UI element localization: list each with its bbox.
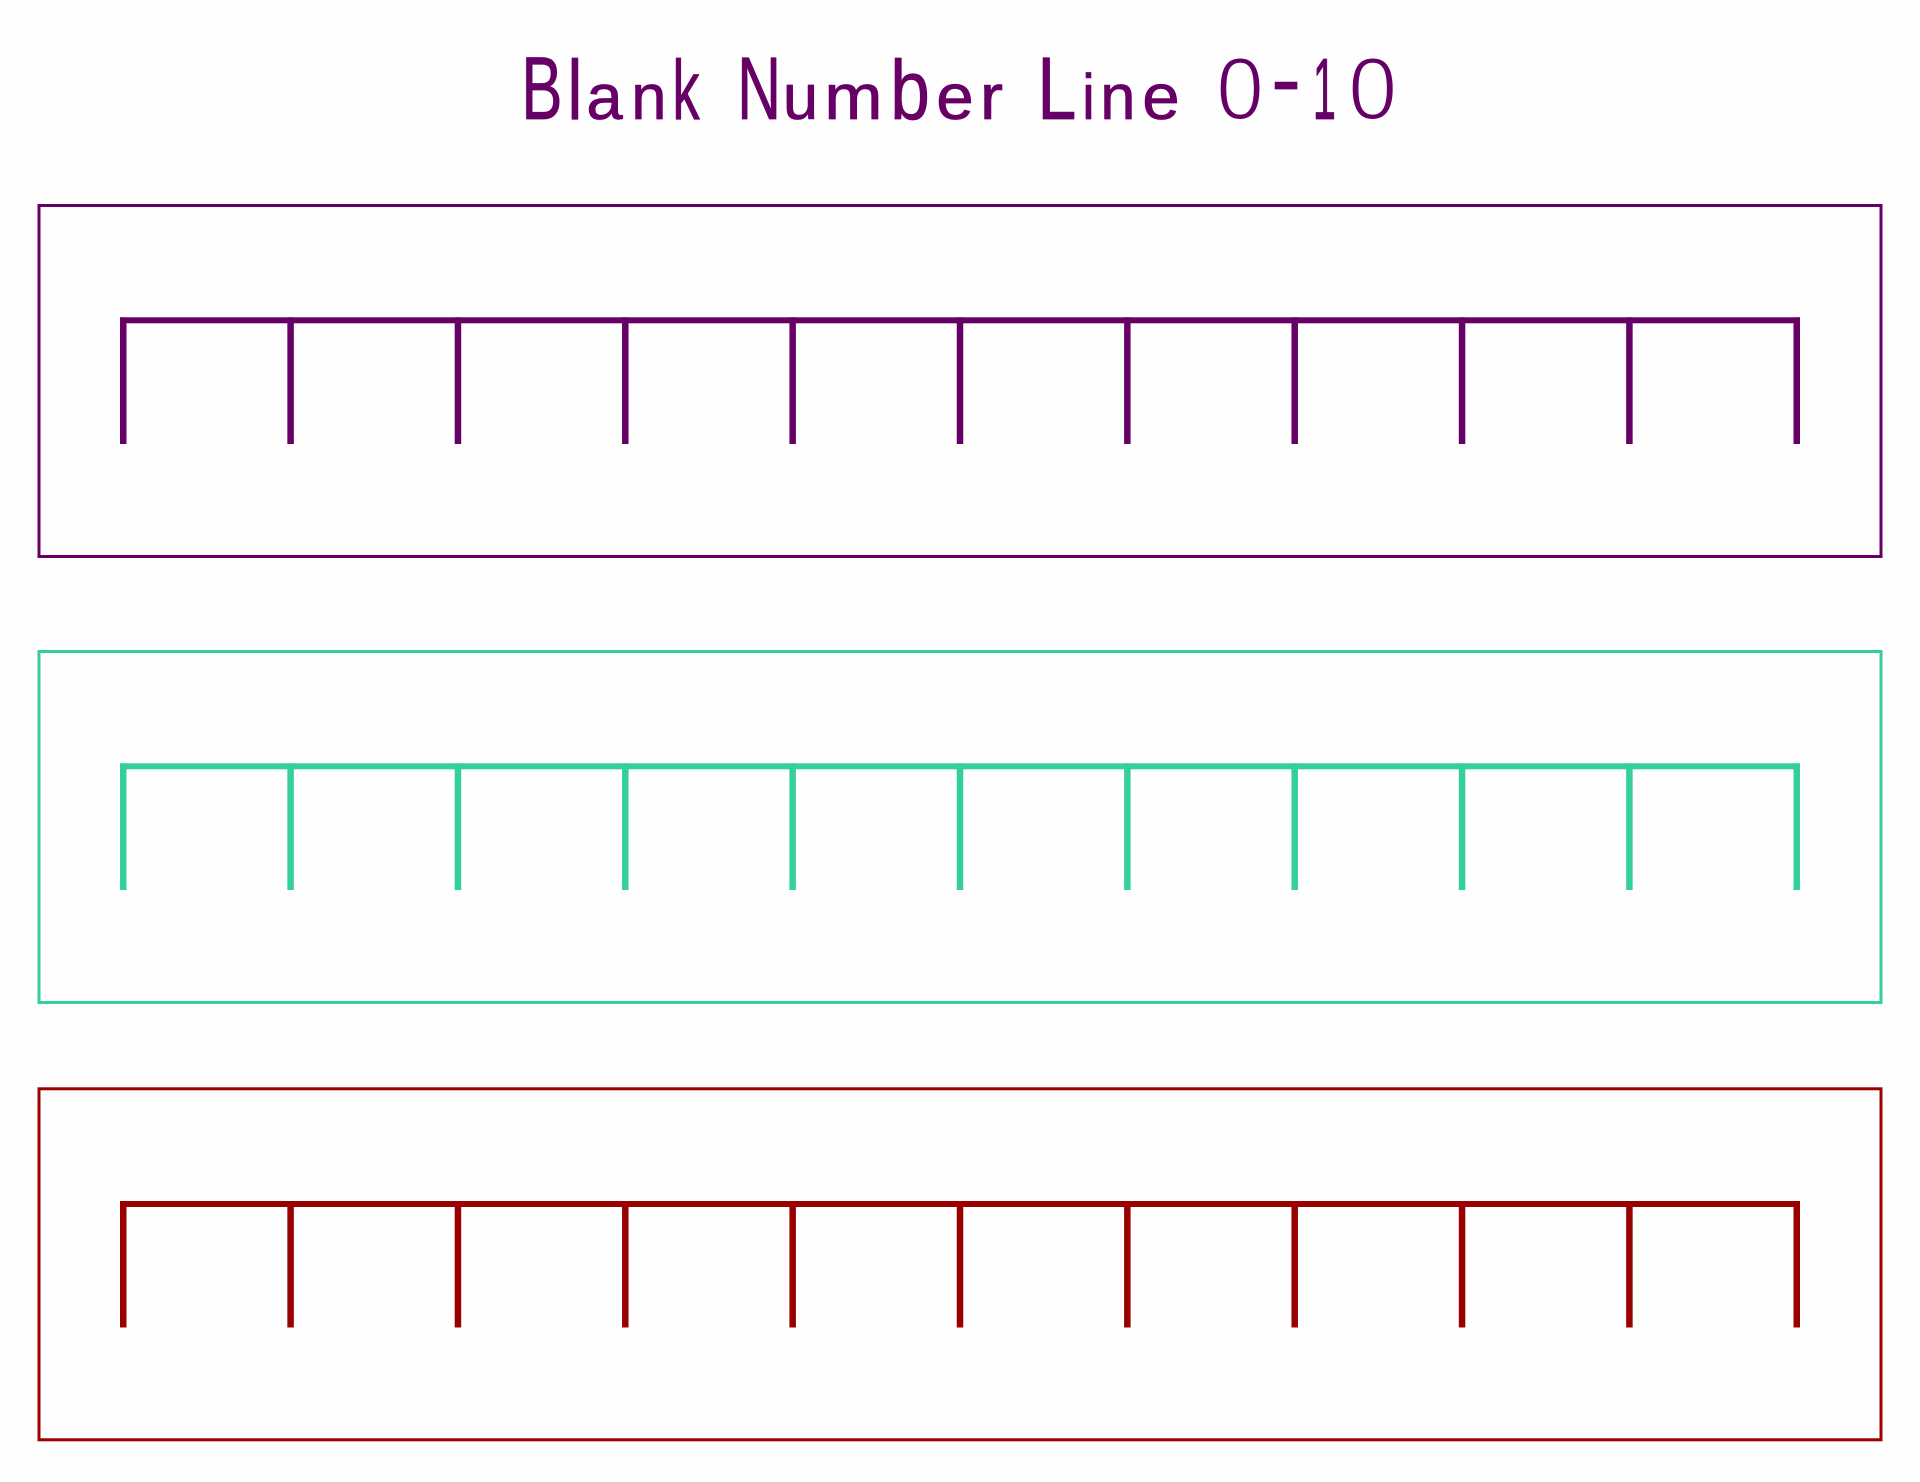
title: r xyxy=(980,61,1003,133)
number line: red xyxy=(120,1201,1800,1328)
title: L xyxy=(1037,38,1076,138)
panel: red number line xyxy=(39,1089,1881,1440)
title: l xyxy=(567,43,582,137)
title: 0 xyxy=(1348,39,1397,138)
title xyxy=(521,31,1397,138)
number line: purple xyxy=(120,317,1800,444)
title: k xyxy=(672,43,700,137)
title: a xyxy=(586,61,623,133)
title: B xyxy=(521,38,562,138)
title: u xyxy=(783,61,818,133)
title: n xyxy=(631,61,666,133)
panel: purple number line xyxy=(39,206,1881,556)
title: - xyxy=(1271,31,1301,128)
title: m xyxy=(824,61,882,133)
title: i xyxy=(1082,61,1095,133)
title: N xyxy=(737,38,781,138)
number line: green xyxy=(120,763,1800,890)
title: 1 xyxy=(1313,41,1336,138)
title: 0 xyxy=(1216,39,1264,138)
title: n xyxy=(1100,61,1136,133)
title: e xyxy=(936,61,974,133)
title: e xyxy=(1142,61,1180,133)
title: b xyxy=(890,43,930,137)
panel: green number line xyxy=(39,652,1881,1002)
